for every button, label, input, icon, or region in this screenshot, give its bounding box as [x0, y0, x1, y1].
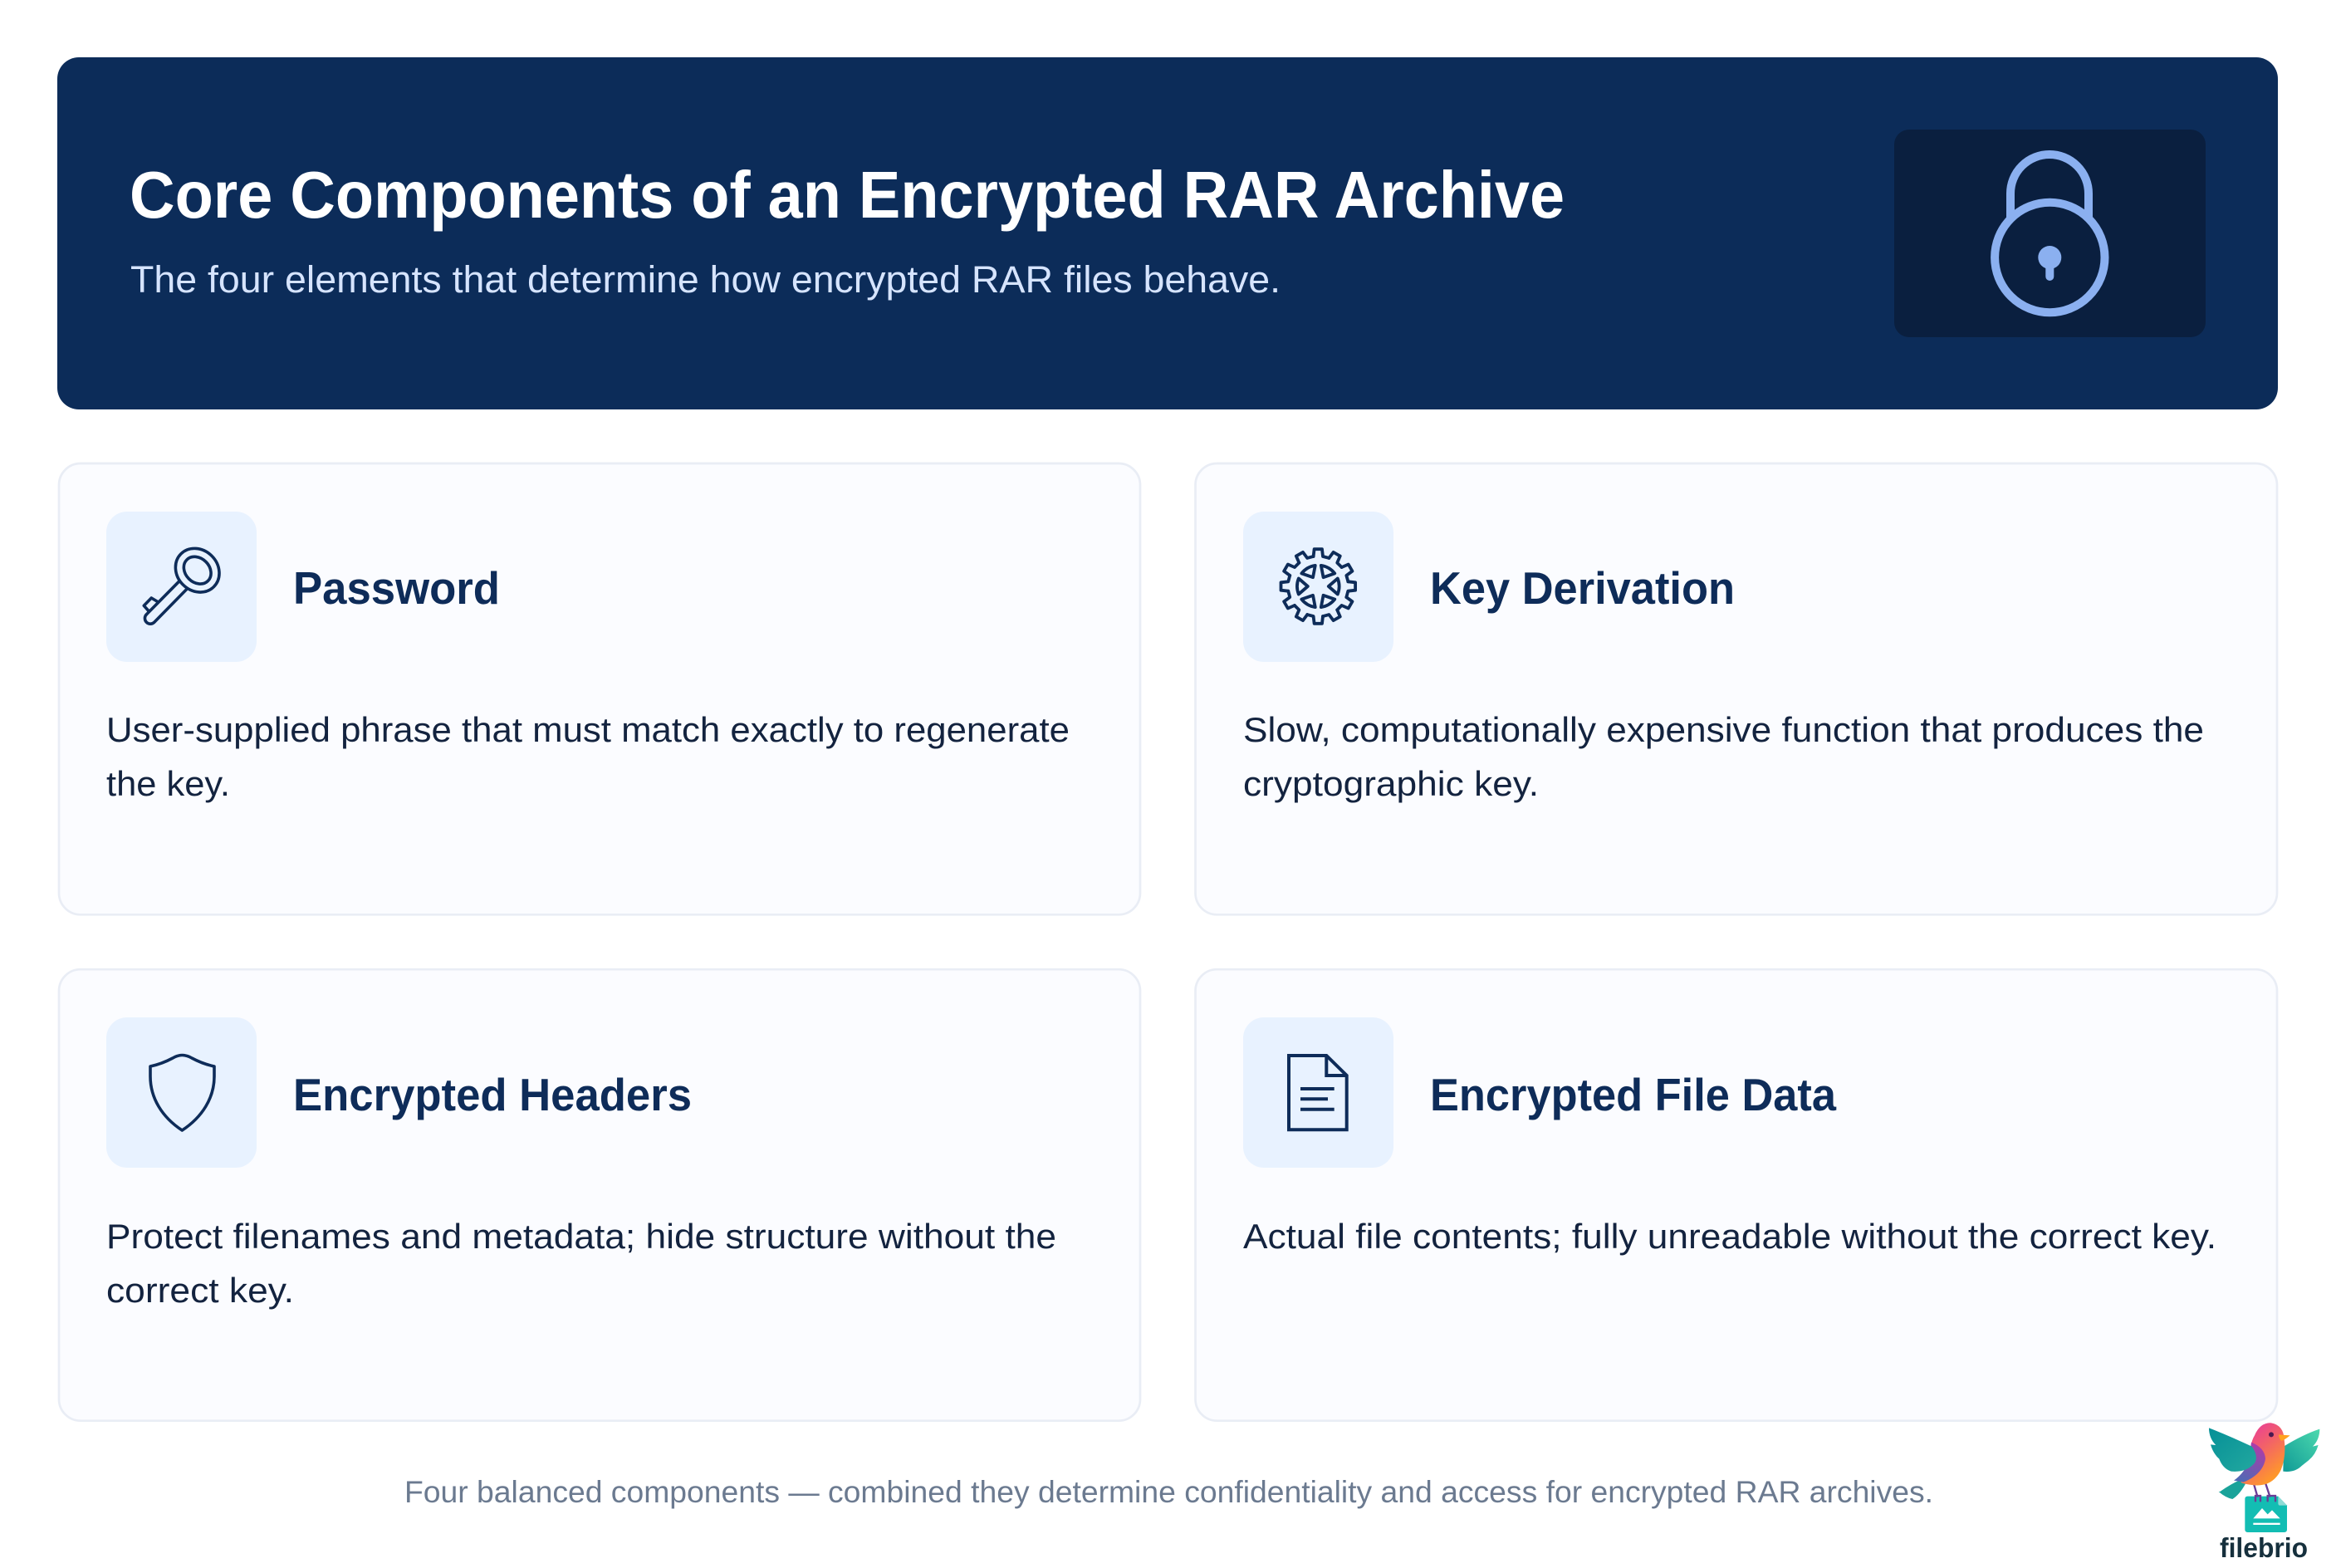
header banner: [57, 57, 2278, 409]
description: password: [106, 710, 1070, 803]
heading: encrypted headers: Encrypted Headers: [293, 1069, 692, 1120]
logo: filebrio bird: [2209, 1423, 2319, 1563]
footer note: Four balanced components — combined they determine confidentiality and access for encrypted RAR archives.: [404, 1475, 1933, 1509]
logo wordmark: filebrio: [2220, 1532, 2308, 1563]
description: key derivation: Slow, computationally expensive function that produces the: [1243, 710, 2204, 749]
description: encrypted headers: [106, 1217, 1056, 1310]
heading: password: Password: [293, 562, 500, 614]
panel: password: [59, 463, 1140, 914]
description: key derivation: [1243, 710, 2204, 803]
panel: key derivation: [1196, 463, 2277, 914]
icon: document: [1289, 1056, 1347, 1129]
panel: encrypted headers: [59, 969, 1140, 1421]
heading: key derivation: Key Derivation: [1430, 562, 1735, 614]
subtitle: The four elements that determine how encrypted RAR files behave.: [130, 258, 1281, 301]
description: encrypted headers: Protect filenames and metadata; hide structure without the: [106, 1217, 1056, 1256]
icon: shield: [150, 1055, 214, 1130]
description: password: the key.: [106, 764, 230, 803]
icon: padlock: [1894, 130, 2206, 337]
title: Core Components of an Encrypted RAR Archive: [130, 158, 1565, 232]
icon: key: [144, 540, 228, 624]
heading: encrypted file data: Encrypted File Data: [1430, 1069, 1836, 1120]
panel: encrypted file data: [1196, 969, 2277, 1421]
description: key derivation: cryptographic key.: [1243, 764, 1539, 803]
description: encrypted headers: correct key.: [106, 1271, 294, 1310]
icon: gear: [1281, 549, 1356, 624]
description: password: User-supplied phrase that must match exactly to regenerate: [106, 710, 1070, 749]
description: encrypted file data: Actual file contents; fully unreadable without the correct key.: [1243, 1217, 2216, 1256]
